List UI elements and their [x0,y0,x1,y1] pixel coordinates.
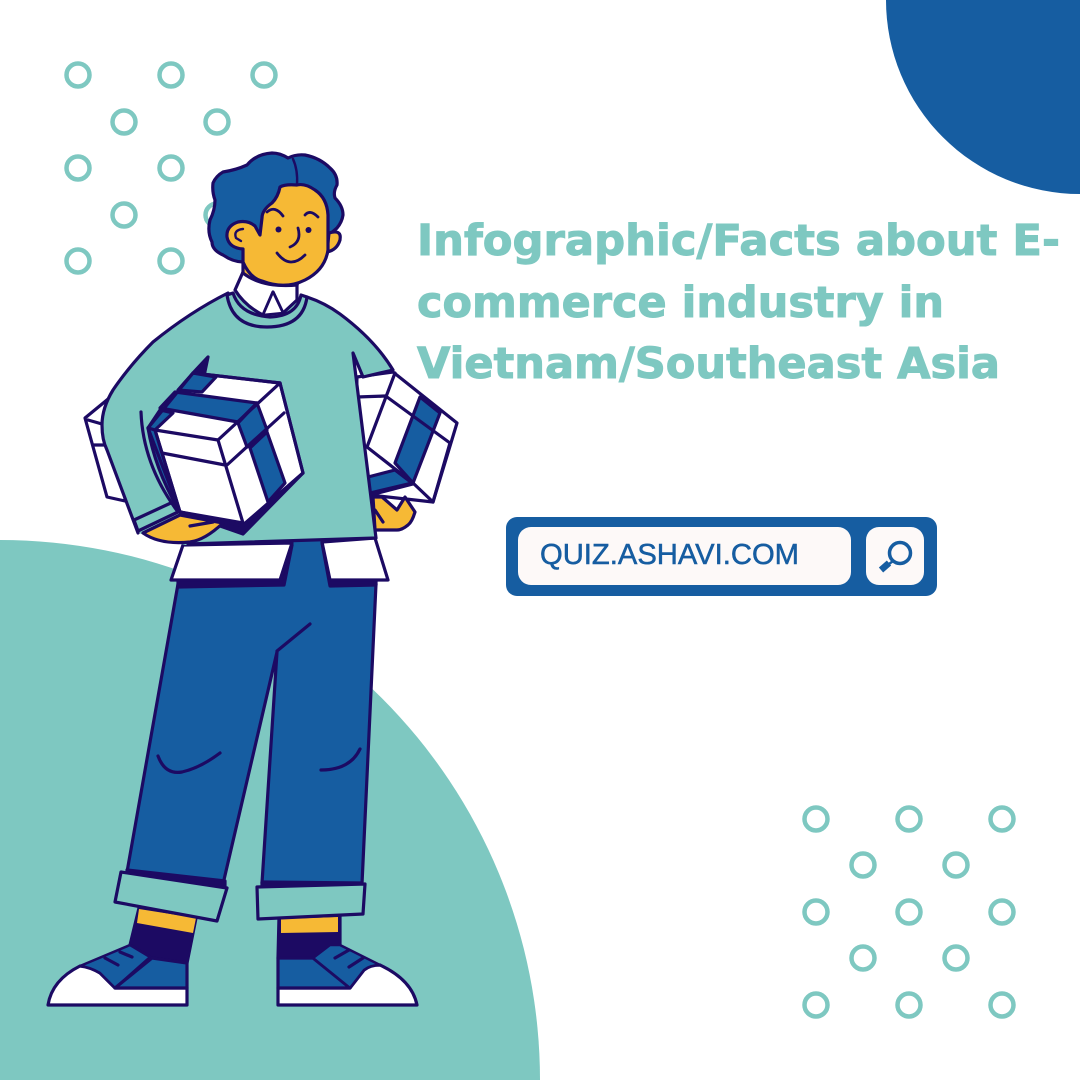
collar and neck [227,262,307,327]
right trouser cuff [257,884,365,919]
left trouser cuff [115,872,227,921]
head and hair [209,153,343,285]
parcel behind right side [355,372,457,502]
left shoe [48,945,187,1005]
shirt hem right [322,538,388,586]
sweater left sleeve cuff [134,502,178,531]
teal quarter circle bottom left [0,540,540,1080]
illustration: person carrying parcels [48,153,457,1005]
search bar [506,517,937,596]
search button [866,527,924,585]
parcel behind left elbow [85,395,125,501]
blue quarter circle top right [886,0,1080,194]
dot pattern bottom right [804,808,1014,1016]
title: Infographic/Facts about E- [417,216,1060,266]
icon: magnifying glass [881,542,910,570]
parcel held under arm [141,357,303,534]
left hand [143,515,223,543]
title: commerce industry in [417,278,944,328]
trousers [127,541,376,889]
title [417,216,1060,389]
right hand [373,497,415,530]
right shoe [278,945,417,1005]
title: Vietnam/Southeast Asia [417,339,1000,389]
search bar url text: QUIZ.ASHAVI.COM [540,539,799,571]
left leg sock [130,908,196,963]
dot pattern top left [66,64,276,272]
right leg sock [278,915,340,958]
shirt hem left [171,543,292,587]
search input field [518,527,851,585]
sweater [102,292,393,545]
